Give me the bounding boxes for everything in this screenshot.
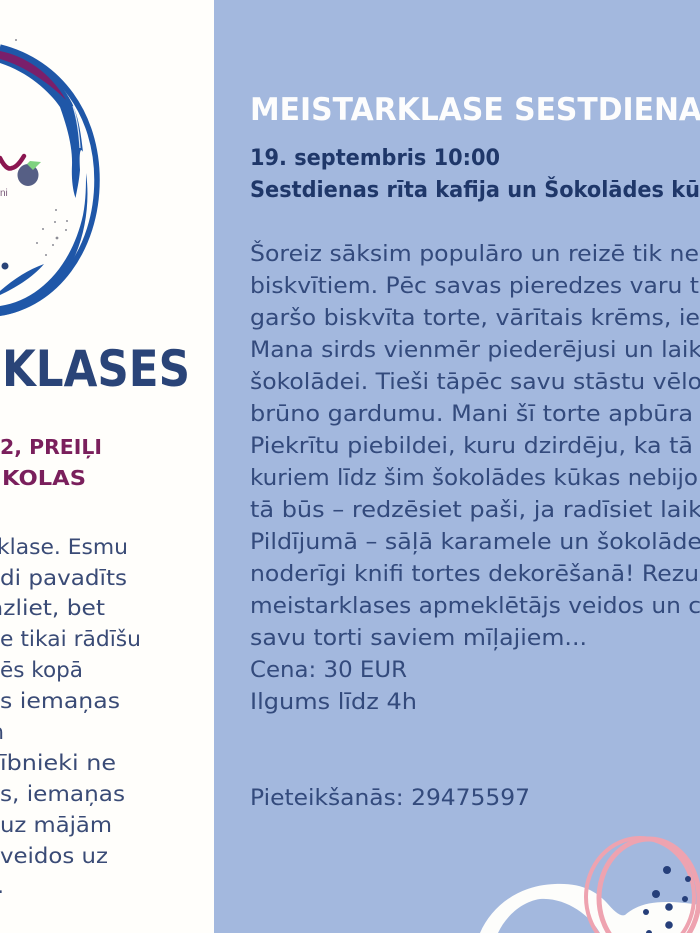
subheading: place <box>0 435 102 490</box>
text block: class description: brūno gardumu. Mani šī torte apbūra <box>250 401 693 427</box>
subheading: place: 2, PREIĻI <box>0 435 102 459</box>
text block: class description <box>250 239 700 715</box>
date and event name <box>250 145 700 203</box>
text block: left description <box>0 535 141 899</box>
logo: circular brush rings with berry: ni <box>0 188 8 199</box>
text block: class description: Pildījumā – sāļā karamele un šokolāde <box>250 529 700 555</box>
text block: left description: di pavadīts <box>0 566 127 591</box>
text block: class description: šokolādei. Tieši tāpēc savu stāstu vēlo <box>250 369 700 395</box>
logo: circular brush rings with berry <box>0 39 97 316</box>
text block: class description: savu torti saviem mīļajiem... <box>250 625 587 651</box>
text block: left description: s, iemaņas <box>0 782 125 807</box>
panel: right blue column <box>214 0 700 933</box>
text block: left description: ēs kopā <box>0 658 83 683</box>
text block: class description: Piekrītu piebildei, kuru dzirdēju, ka tā <box>250 433 693 459</box>
heading: KLASES: KLASES <box>2 340 190 398</box>
text block: class description: noderīgi knifi tortes dekorēšanā! Rezu <box>250 561 699 587</box>
text block: class description: Šoreiz sāksim populāro un reizē tik ne <box>250 239 699 267</box>
panel: left white column <box>0 0 214 933</box>
text block: class description: Cena: 30 EUR <box>250 657 407 683</box>
text block: class description: kuriem līdz šim šokolādes kūkas nebijo <box>250 465 698 491</box>
date and event name: 19. septembris 10:00 <box>250 145 500 171</box>
text block: left description: veidos uz <box>0 844 108 869</box>
text block: left description: klase. Esmu <box>0 535 128 560</box>
text block: class description: biskvītiem. Pēc savas pieredzes varu t <box>250 273 699 299</box>
subheading: place: KOLAS <box>2 466 86 490</box>
text block: left description: e tikai rādīšu <box>0 627 141 652</box>
text block: class description: tā būs – redzēsiet paši, ja radīsiet laik <box>250 497 700 523</box>
text block: class description: garšo biskvīta torte, vārītais krēms, ie <box>250 305 700 331</box>
decoration: heart with pink rings and dots <box>480 838 700 933</box>
contact line: Pieteikšanās: 29475597 <box>250 785 530 811</box>
text block: class description: Mana sirds vienmēr piederējusi un laik <box>250 337 700 363</box>
text block: left description: uz mājām <box>0 813 112 838</box>
text block: left description: ībnieki ne <box>0 751 116 776</box>
text block: class description: Ilgums līdz 4h <box>250 689 417 715</box>
text block: class description: meistarklases apmeklētājs veidos un c <box>250 593 700 619</box>
text block: left description: s iemaņas <box>0 689 120 714</box>
